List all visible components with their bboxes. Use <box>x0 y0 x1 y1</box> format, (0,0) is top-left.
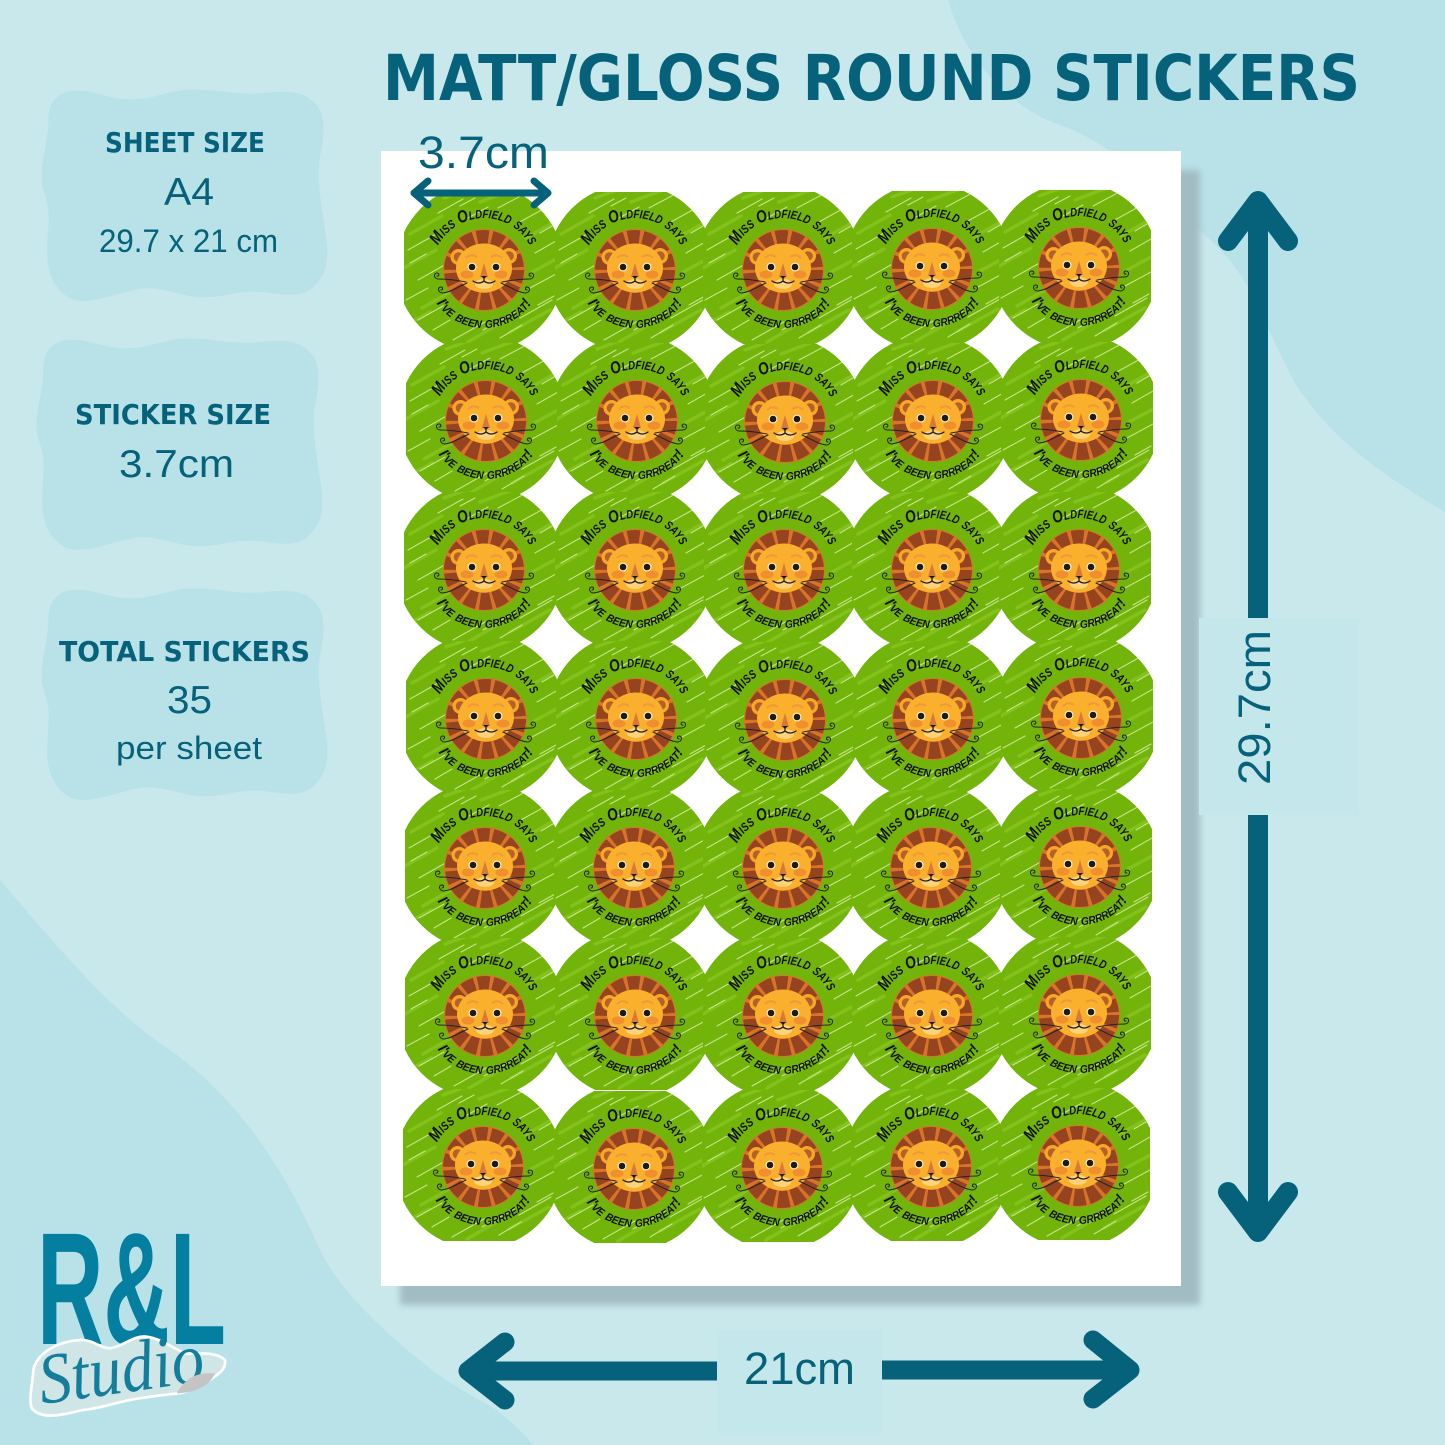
sticker r1c1 <box>404 196 556 344</box>
sticker r1c5 <box>999 190 1152 342</box>
sticker r1c1: I've been grrreat! <box>436 297 530 328</box>
sticker r3c1: Miss Oldfield says <box>429 510 536 546</box>
sticker r1c4 <box>852 191 1002 343</box>
heading: sheet size: SHEET SIZE <box>105 126 265 159</box>
sticker r2c5: I've been grrreat! <box>1034 447 1128 478</box>
logo: R&L Studio <box>31 1199 226 1420</box>
sticker r5c5: I've been grrreat! <box>1029 892 1131 929</box>
sticker r5c1: Miss Oldfield says <box>426 801 544 846</box>
sticker r4c2 <box>556 641 707 792</box>
sticker r6c1: I've been grrreat! <box>434 1041 536 1078</box>
heading: total stickers: TOTAL STICKERS <box>59 635 310 668</box>
sticker r6c1: Miss Oldfield says <box>426 949 544 994</box>
sticker r2c1: I've been grrreat! <box>438 448 532 479</box>
sticker r1c2: I've been grrreat! <box>588 297 682 328</box>
sticker r3c4 <box>852 492 1002 643</box>
sticker r7c4: I've been grrreat! <box>880 1192 982 1229</box>
sticker r4c2: I've been grrreat! <box>588 746 682 777</box>
sticker r3c1: I've been grrreat! <box>436 597 530 628</box>
sticker r5c2 <box>554 790 704 940</box>
sticker r5c3: I've been grrreat! <box>732 893 834 930</box>
sticker r5c5 <box>1000 789 1152 940</box>
sticker r2c2: I've been grrreat! <box>590 448 684 479</box>
sticker r7c5 <box>998 1088 1150 1240</box>
label: sticker width: 3.7cm <box>418 127 549 178</box>
sticker r2c2: Miss Oldfield says <box>582 360 690 396</box>
sticker r6c3: Miss Oldfield says <box>724 949 842 994</box>
sticker r1c4: Miss Oldfield says <box>877 208 984 244</box>
value: dimensions: 29.7 x 21 cm <box>99 223 278 259</box>
sticker r5c5: Miss Oldfield says <box>1021 800 1139 845</box>
sticker r3c2: Miss Oldfield says <box>580 510 688 546</box>
sticker r7c3 <box>702 1090 853 1242</box>
panel: sheet size <box>41 89 327 301</box>
sticker r7c4: Miss Oldfield says <box>872 1100 990 1145</box>
sticker r7c1 <box>402 1089 555 1241</box>
sticker r3c5: Miss Oldfield says <box>1024 510 1132 546</box>
value: A4: A4 <box>164 171 214 214</box>
sticker r3c5: I've been grrreat! <box>1032 597 1126 628</box>
sticker r2c4: I've been grrreat! <box>886 448 980 479</box>
sticker r3c3: Miss Oldfield says <box>729 510 836 546</box>
sticker r4c1: I've been grrreat! <box>438 746 532 777</box>
sticker r2c2 <box>557 343 708 494</box>
sticker r3c1 <box>404 492 556 643</box>
title: MATT/GLOSS ROUND STICKERS <box>383 42 1360 115</box>
arrow: sheet height <box>1228 201 1288 1232</box>
sticker r4c3: Miss Oldfield says <box>730 660 838 696</box>
sticker r4c4: Miss Oldfield says <box>878 658 986 694</box>
sticker r6c4: I've been grrreat! <box>881 1041 983 1078</box>
label: sheet width: 21cm <box>744 1343 855 1394</box>
logo wordmark: R&L <box>37 1199 226 1378</box>
sticker r1c1: Miss Oldfield says <box>429 210 536 246</box>
logo sticker badge <box>31 1336 225 1416</box>
sticker r2c3 <box>705 344 856 494</box>
sticker r3c4: Miss Oldfield says <box>877 510 984 546</box>
sticker r7c2: Miss Oldfield says <box>575 1102 693 1147</box>
sticker r6c3 <box>703 938 854 1090</box>
sticker r7c2 <box>554 1091 704 1243</box>
background blob: top right <box>948 0 1445 512</box>
sticker r5c2: Miss Oldfield says <box>575 801 693 846</box>
sticker r3c3: I've been grrreat! <box>736 597 830 628</box>
sticker r4c2: Miss Oldfield says <box>581 658 688 694</box>
sticker r5c4: Miss Oldfield says <box>872 801 990 846</box>
sticker r6c4: Miss Oldfield says <box>873 949 991 994</box>
sticker r7c1: I've been grrreat! <box>432 1192 534 1229</box>
sticker r7c4 <box>851 1089 1001 1241</box>
sticker r4c5: I've been grrreat! <box>1034 745 1128 776</box>
sticker r2c5: Miss Oldfield says <box>1026 360 1134 396</box>
sticker r4c1: Miss Oldfield says <box>431 658 538 694</box>
sticker r1c2 <box>555 192 705 344</box>
sticker r2c3: Miss Oldfield says <box>730 362 838 398</box>
sticker r3c2 <box>555 492 706 643</box>
heading: sticker size: STICKER SIZE <box>75 398 271 431</box>
sticker r6c3: I've been grrreat! <box>732 1041 834 1078</box>
sticker r6c2: I've been grrreat! <box>584 1041 686 1078</box>
sticker r5c1: I've been grrreat! <box>434 893 536 930</box>
sticker r5c4: I've been grrreat! <box>880 893 982 930</box>
panel: sticker size <box>36 338 322 550</box>
arrow: sticker width <box>414 181 548 205</box>
sticker r4c3 <box>705 642 856 792</box>
value: 35: 35 <box>167 679 212 722</box>
value: per sheet: per sheet <box>116 730 262 766</box>
sticker r4c5 <box>1001 640 1154 791</box>
sticker r6c5: I've been grrreat! <box>1028 1040 1130 1077</box>
sticker r3c4: I've been grrreat! <box>884 597 978 628</box>
sticker r3c3 <box>704 492 854 644</box>
sticker r1c2: Miss Oldfield says <box>580 210 688 246</box>
sticker r2c4: Miss Oldfield says <box>878 360 986 396</box>
panel: total stickers <box>41 588 327 800</box>
sticker r5c1 <box>404 790 556 940</box>
arrow: sheet width <box>468 1340 1130 1400</box>
logo page curl <box>177 1373 215 1393</box>
label: sheet width <box>717 1330 882 1433</box>
background blob: bottom left <box>0 880 533 1445</box>
sticker r7c3: Miss Oldfield says <box>723 1101 841 1146</box>
sticker r1c3 <box>703 192 854 344</box>
sticker r7c5: Miss Oldfield says <box>1019 1099 1137 1144</box>
sticker r1c3: Miss Oldfield says <box>728 210 836 246</box>
sticker r4c1 <box>406 641 557 792</box>
sticker r4c5: Miss Oldfield says <box>1026 658 1134 694</box>
sticker r2c4 <box>853 343 1004 494</box>
sticker r7c2: I've been grrreat! <box>583 1194 685 1231</box>
sticker r4c4: I've been grrreat! <box>886 746 980 777</box>
sheet shadow <box>400 170 1200 1305</box>
sticker r5c3: Miss Oldfield says <box>724 801 842 846</box>
sticker r1c3: I've been grrreat! <box>736 297 830 328</box>
sticker r5c3 <box>703 790 853 940</box>
sticker r4c3: I've been grrreat! <box>738 747 832 778</box>
sticker r6c5 <box>999 937 1152 1089</box>
sticker r1c5: I've been grrreat! <box>1032 295 1126 326</box>
sticker r7c5: I've been grrreat! <box>1027 1191 1129 1228</box>
label: sheet height: 29.7cm <box>1229 630 1280 785</box>
sticker r1c4: I've been grrreat! <box>884 296 978 327</box>
sticker r2c5 <box>1001 342 1154 494</box>
sticker r6c2: Miss Oldfield says <box>576 949 694 994</box>
sticker r2c3: I've been grrreat! <box>738 449 832 480</box>
sticker r2c1 <box>406 343 558 494</box>
value: sticker diameter: 3.7cm <box>119 443 234 486</box>
sticker r1c5: Miss Oldfield says <box>1024 208 1132 244</box>
sticker r6c5: Miss Oldfield says <box>1020 948 1138 993</box>
label: sheet height <box>1199 618 1359 815</box>
sticker r5c4 <box>851 790 1002 940</box>
panel: A4 sticker sheet <box>381 151 1181 1286</box>
sticker r5c2: I've been grrreat! <box>583 893 685 930</box>
sticker r3c2: I've been grrreat! <box>588 597 682 628</box>
sticker r3c5 <box>999 492 1152 642</box>
sticker r6c2 <box>555 938 705 1090</box>
sticker r2c1: Miss Oldfield says <box>431 360 538 396</box>
sticker r7c1: Miss Oldfield says <box>424 1100 542 1145</box>
sticker r4c4 <box>853 641 1004 792</box>
logo script: Studio <box>33 1318 209 1420</box>
sticker r7c3: I've been grrreat! <box>731 1193 833 1230</box>
sticker r6c1 <box>404 938 556 1090</box>
sticker r6c4 <box>852 938 1002 1090</box>
